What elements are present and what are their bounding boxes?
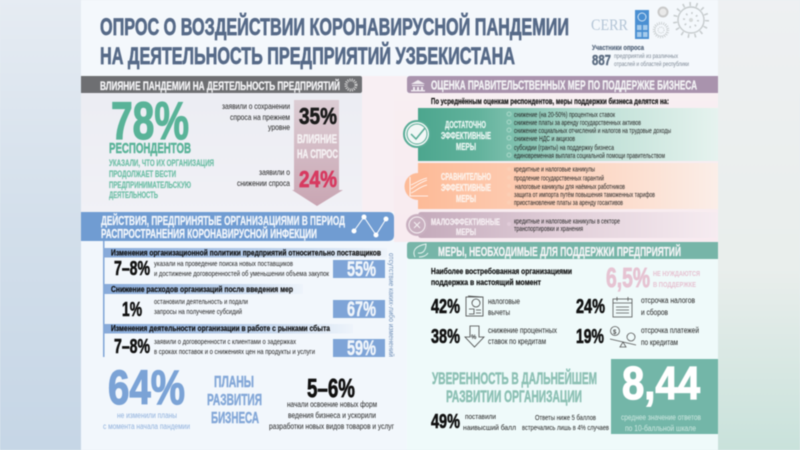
heading: plans (207, 374, 262, 427)
heading: support measures (407, 242, 718, 259)
row: costs: запросы на получение субсидий (154, 307, 242, 316)
stat: 6.5%: НЕ НУЖДАЮТСЯ (653, 271, 700, 278)
demand labels: заявили о сохранении (222, 101, 290, 111)
item: loan deferral (576, 326, 699, 348)
measures: comparatively effective (404, 163, 718, 209)
heading: actions: ДЕЙСТВИЯ, ПРЕДПРИНЯТЫЕ ОРГАНИЗАЦИЯМИ В ПЕРИОД (101, 213, 345, 228)
measures: effective: субсидии (гранты) на поддержку бизнеса (514, 143, 615, 152)
row: markets: 59% (347, 337, 376, 360)
note: below 5 points (522, 413, 609, 432)
survey participants: Участники опроса (592, 43, 645, 52)
measures: comparatively effective: СРАВНИТЕЛЬНО (441, 172, 491, 183)
stat: 78% respondents (109, 92, 214, 200)
demand labels: уровне (268, 122, 290, 132)
panel: support measures (407, 242, 718, 434)
measures: comparatively effective: налоговые каникулы для наёмных работников (515, 182, 625, 191)
row: suppliers: 55% (347, 258, 376, 281)
stat: 78% respondents: ДЕЯТЕЛЬНОСТЬ (109, 190, 158, 200)
heading: government measures (407, 76, 718, 93)
stat: 78% respondents: РЕСПОНДЕНТОВ (109, 140, 191, 157)
stat: 5-6%: ведения бизнеса и ускорили (288, 410, 376, 420)
vertical note: отсутствие каких-либо изменений (387, 253, 395, 357)
note: below 5 points: встречались лишь в 4% случаев (522, 423, 609, 432)
subheading: most demanded (431, 266, 572, 287)
demand labels: НА СПРОС (297, 147, 338, 161)
measures: effective: снижение платы за аренду государственных активов (514, 118, 641, 127)
row: suppliers: указали на проведение поиска новых поставщиков (154, 259, 293, 268)
measures: low effectiveness (406, 212, 718, 238)
stat box: 8.44: 8,44 (622, 357, 700, 409)
row: costs: 67% (347, 298, 376, 321)
title (100, 13, 569, 70)
stat: 64% (103, 362, 190, 431)
survey participants: отраслей и областей республики (614, 60, 689, 68)
item: tax deductions: 42% (431, 296, 460, 318)
measures: effective: ЭФФЕКТИВНЫЕ (441, 131, 491, 142)
demand labels: заявили о (259, 167, 290, 177)
heading: plans: БИЗНЕСА (211, 410, 259, 427)
row: costs: остановили деятельность и подали (154, 297, 248, 306)
stat: 78% respondents: 78% (111, 92, 189, 151)
panel: government measures (404, 76, 718, 238)
stat: 64%: с момента начала пандемии (103, 422, 190, 431)
measures: low effectiveness: МАЛОЭФФЕКТИВНЫЕ (431, 217, 500, 228)
stat: 6.5% (606, 262, 700, 293)
measures: effective: ДОСТАТОЧНО (445, 120, 486, 131)
demand labels (222, 101, 338, 192)
demand labels: ВЛИЯНИЕ (297, 132, 337, 146)
panel: business plans (103, 362, 394, 431)
measures: comparatively effective: продление государственных гарантий (514, 174, 604, 182)
survey participants: предприятий из различных (614, 52, 679, 60)
stat: 78% respondents: ПРЕДПРИНИМАТЕЛЬСКУЮ (109, 180, 191, 190)
measures: effective: снижение социальных отчислений и налогов на трудовые доходы (514, 126, 671, 135)
logo: round emblem (658, 8, 668, 16)
row: costs: Снижение расходов организаций после введения мер (111, 284, 293, 294)
heading: pandemic impact: ВЛИЯНИЕ ПАНДЕМИИ НА ДЕЯТЕЛЬНОСТЬ ПРЕДПРИЯТИЙ (100, 80, 340, 93)
row: suppliers: и достижение договоренностей об уменьшении объема закупок (154, 269, 330, 278)
row: markets: в сроках поставок и о снижениях цен на продукты и услуги (154, 347, 315, 356)
item: loan deferral: отсрочка платежей (641, 326, 699, 335)
icon: large virus (675, 4, 707, 36)
stat: 78% respondents: УКАЗАЛИ, ЧТО ИХ ОРГАНИЗАЦИЯ (109, 158, 214, 168)
arrow: demand impact (292, 100, 343, 206)
measures: effective: снижение (на 20-50%) процентных ставок (514, 110, 615, 119)
item: loan deferral: по кредитам (641, 338, 678, 347)
item: loan deferral: 19% (576, 326, 604, 348)
stat: 49%: наивысший балл (463, 423, 516, 432)
row: suppliers (103, 248, 387, 281)
logo: UNDP (635, 10, 649, 39)
measures: comparatively effective: приостановление платы за аренду госактивов (514, 198, 623, 207)
icon: small virus (654, 23, 668, 37)
measures: comparatively effective: МЕРЫ (456, 194, 476, 205)
measures: comparatively effective: кредитные и налоговые каникулы (514, 164, 595, 174)
item: tax deferral: и сборов (641, 308, 668, 317)
row: markets: Изменения деятельности организации в работе с рынками сбыта (111, 323, 330, 333)
demand labels: снижении спроса (237, 178, 290, 188)
item: rate cuts: снижение процентных (488, 326, 557, 335)
survey participants (592, 43, 689, 69)
stat: 64%: 64% (108, 362, 185, 415)
heading: confidence: УВЕРЕННОСТЬ В ДАЛЬНЕЙШЕМ (432, 369, 597, 388)
item: loan deferral: $ (613, 330, 617, 336)
demand labels: спроса на прежнем (230, 112, 290, 122)
heading: pandemic impact (81, 76, 362, 93)
item: rate cuts: % (471, 335, 477, 341)
stat: 78% respondents: ПРОДОЛЖАЕТ ВЕСТИ (109, 169, 176, 179)
stat: 6.5%: В ПОДДЕРЖКЕ (653, 282, 696, 289)
heading: actions: РАСПРОСТРАНЕНИЯ КОРОНАВИРУСНОЙ ИНФЕКЦИИ (101, 226, 317, 241)
demand labels: 35% (299, 103, 337, 129)
item: rate cuts: 38% (431, 326, 460, 348)
stat: 6.5%: 6,5% (606, 262, 650, 293)
stat: 5-6% (269, 373, 394, 431)
survey participants: 887 (592, 52, 611, 69)
title: НА ДЕЯТЕЛЬНОСТЬ ПРЕДПРИЯТИЙ УЗБЕКИСТАНА (100, 42, 515, 70)
item: tax deferral: отсрочка налогов (641, 296, 695, 305)
item: tax deferral: 24% (576, 296, 605, 318)
subheading: По усреднённым оценкам респондентов, меры поддержки бизнеса делятся на: (431, 96, 669, 106)
measures: effective: единовременная выплата социальной помощи правительством (514, 151, 665, 160)
item: rate cuts: ставок по кредитам (488, 337, 546, 346)
stat box: 8.44 (611, 357, 718, 434)
stat box: 8.44: среднее значение ответов (621, 413, 701, 422)
measures: comparatively effective: ЭФФЕКТИВНЫЕ (441, 183, 491, 194)
row: costs: 1% (122, 299, 142, 321)
row: markets: заявили о договоренности с клиентами о задержках (154, 337, 296, 346)
title: ОПРОС О ВОЗДЕЙСТВИИ КОРОНАВИРУСНОЙ ПАНДЕМИИ (100, 13, 569, 41)
stat: 64%: не изменили планы (117, 411, 177, 420)
stat box: 8.44: по 10-балльной шкале (625, 424, 696, 433)
heading: actions (81, 212, 394, 241)
subheading: most demanded: поддержка в настоящий момент (431, 277, 541, 287)
measures: low effectiveness: кредитные и налоговые каникулы в секторе (514, 216, 620, 226)
item: tax deductions: вычеты (488, 308, 510, 317)
stat: 5-6%: 5–6% (307, 373, 355, 403)
row: suppliers: 7–8% (114, 258, 150, 280)
stat: 5-6%: разработки новых видов товаров и услуг (269, 421, 394, 431)
measures: effective: снижение НДС и акцизов (514, 134, 575, 143)
heading: plans: РАЗВИТИЯ (207, 392, 262, 409)
measures: effective: МЕРЫ (456, 142, 476, 153)
panel: pandemic impact (81, 76, 362, 206)
panel: actions (81, 212, 395, 360)
stat: 5-6%: начали освоение новых форм (287, 399, 377, 409)
row: markets: 7–8% (114, 336, 150, 358)
logos (591, 4, 707, 39)
row: suppliers: Изменения организационной политики предприятий относительно поставщиков (111, 248, 381, 258)
heading: confidence: РАЗВИТИИ ОРГАНИЗАЦИИ (446, 387, 582, 406)
item: tax deferral (576, 296, 695, 318)
demand labels: 24% (299, 166, 337, 192)
measures: low effectiveness: МЕРЫ (456, 227, 476, 238)
item: rate cuts (431, 326, 557, 348)
row: costs (103, 284, 385, 321)
stat: 49%: поставили (465, 412, 496, 421)
item: tax deductions (431, 296, 520, 318)
stat: 49%: 49% (431, 411, 460, 433)
logo: CERR: CERR (591, 17, 628, 34)
heading: plans: ПЛАНЫ (214, 374, 254, 391)
stat: 49% (431, 411, 516, 433)
row: markets (103, 323, 385, 360)
subheading: most demanded: Наиболее востребованная организациями (431, 266, 572, 276)
item: tax deductions: налоговые (488, 297, 520, 306)
measures: comparatively effective: защита от импорта путём повышения таможенных тарифов (514, 190, 655, 199)
measures: low effectiveness: транспортировки и хранения (514, 224, 583, 233)
measures: effective (404, 108, 718, 161)
note: below 5 points: Ответы ниже 5 баллов (535, 413, 596, 422)
heading: confidence (432, 369, 597, 406)
